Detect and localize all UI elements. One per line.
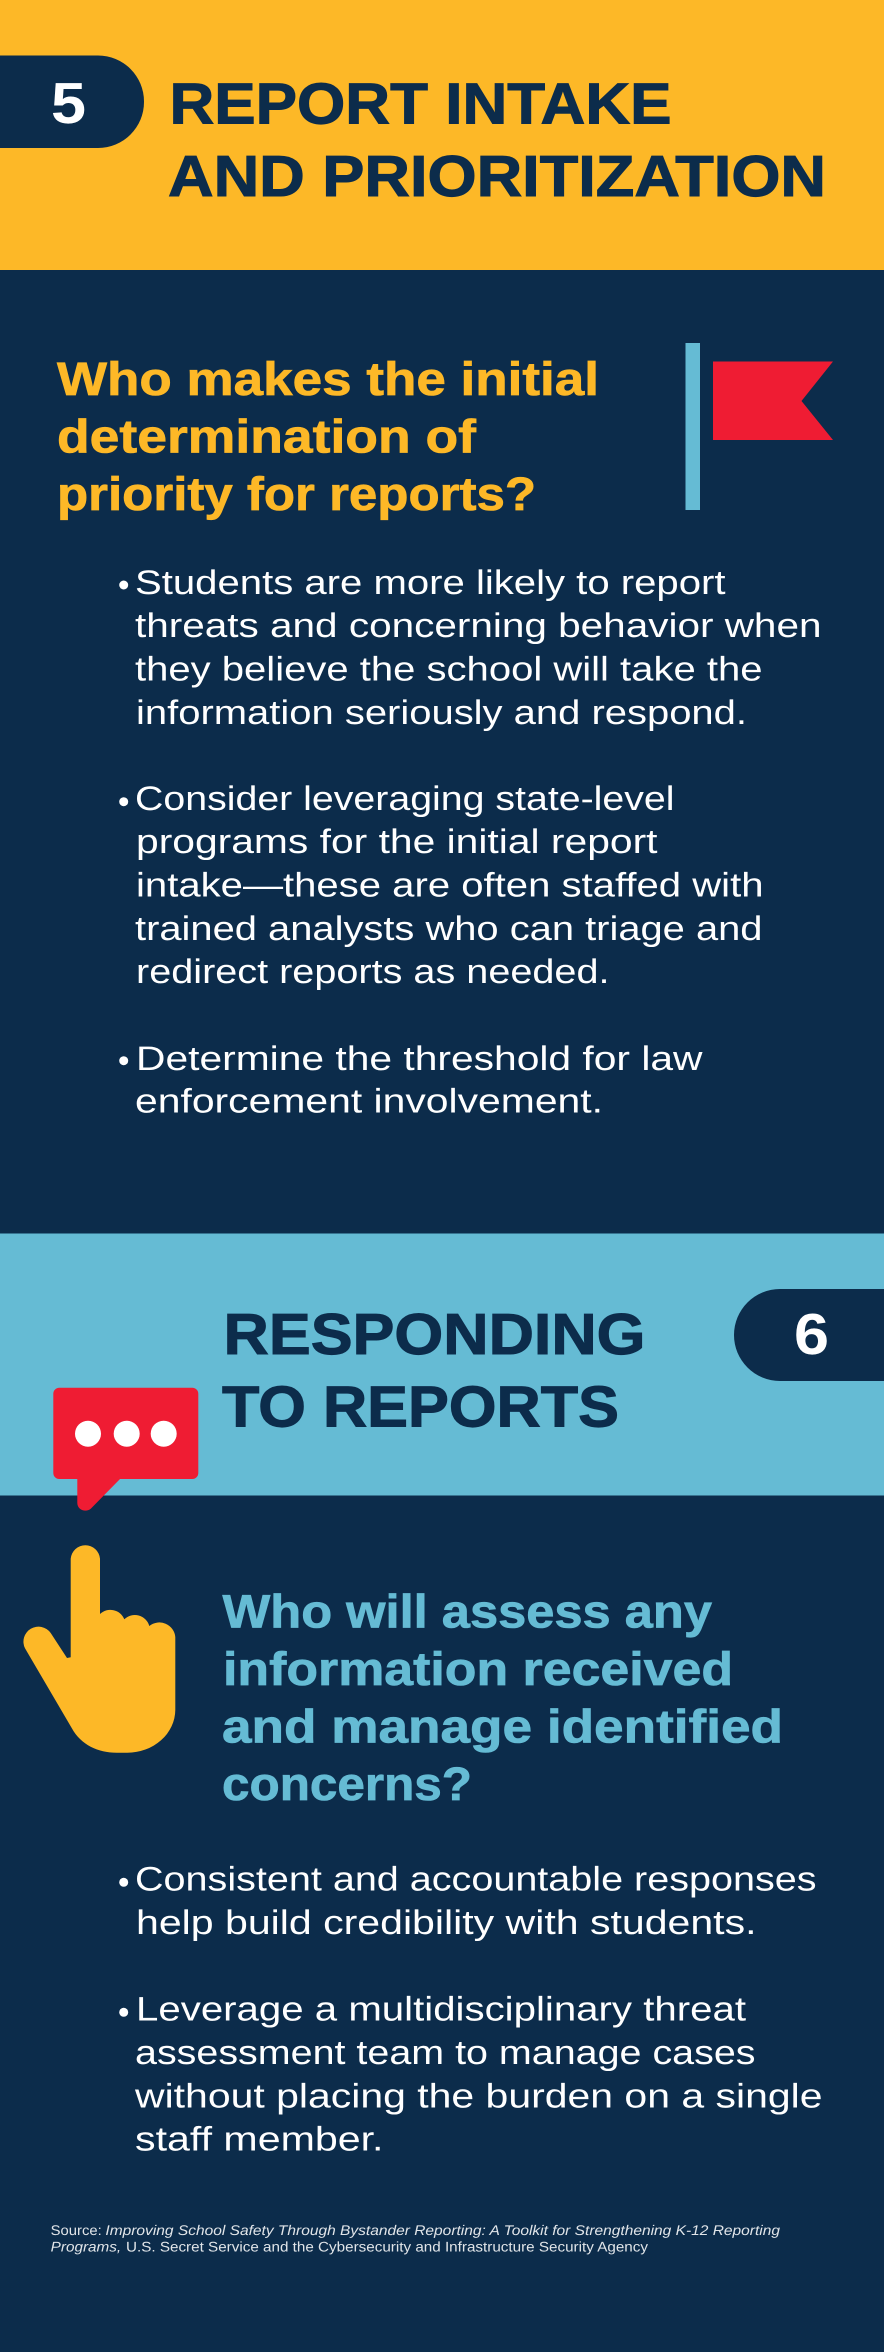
bullet: state-level programs: programs for the initial report: [136, 823, 658, 861]
heading: who will assess any information: Who will assess any: [222, 1585, 712, 1638]
source citation: U.S. Secret Service and the Cybersecurity and Infrastructure Security Agency: [126, 2239, 648, 2255]
source citation: Source:: [51, 2222, 102, 2238]
bullet: consistent responses: [119, 1861, 816, 1942]
heading: who will assess any information: [222, 1585, 783, 1810]
bullet: students more likely to report: they believe the school will take the: [135, 650, 762, 688]
source citation: Programs,: [51, 2239, 121, 2255]
bullet: students more likely to report: Students are more likely to report: [135, 564, 726, 602]
bullet: state-level programs: [119, 780, 763, 991]
number badge 6: [734, 1289, 884, 1381]
heading: who makes the initial determination: determination of: [57, 410, 476, 462]
bullet: multidisciplinary team: Leverage a multidisciplinary threat: [136, 1991, 747, 2029]
source citation: Improving School Safety Through Bystander Reporting: A Toolkit for Strengthening K-12 Reporting: [105, 2222, 780, 2238]
title: report intake and prioritization: AND PRIORITIZATION: [168, 144, 826, 209]
bullet: multidisciplinary team: [119, 1991, 822, 2159]
title: report intake and prioritization: REPORT INTAKE: [170, 72, 672, 136]
bullet: state-level programs: redirect reports as needed.: [136, 953, 610, 991]
heading: who makes the initial determination: Who makes the initial: [57, 352, 599, 405]
number badge 5: 5: [51, 71, 86, 136]
icon: red speech bubble: [53, 1388, 198, 1511]
bullet: law enforcement threshold: [119, 1040, 703, 1121]
title: responding to reports: RESPONDING: [224, 1302, 646, 1367]
icon: red flag: [686, 343, 833, 510]
bullet: students more likely to report: information seriously and respond.: [136, 694, 747, 732]
bullet: students more likely to report: [119, 564, 821, 732]
bullet: consistent responses: help build credibility with students.: [136, 1904, 756, 1942]
title: report intake and prioritization: [168, 72, 826, 209]
panel: section 5 header: [0, 0, 884, 270]
heading: who makes the initial determination: [57, 352, 599, 520]
panel: section 6 header: [0, 1234, 884, 1496]
heading: who will assess any information: concerns?: [222, 1757, 472, 1810]
bullet: state-level programs: Consider leveraging state-level: [135, 780, 674, 818]
bullet: state-level programs: trained analysts who can triage and: [135, 910, 762, 948]
bullet: consistent responses: Consistent and accountable responses: [135, 1861, 816, 1899]
icon: yellow pointing hand: [23, 1545, 175, 1753]
bullet: law enforcement threshold: enforcement involvement.: [135, 1083, 603, 1121]
bullet: state-level programs: intake—these are often staffed with: [136, 866, 764, 904]
bullet: multidisciplinary team: staff member.: [135, 2121, 384, 2159]
bullet: multidisciplinary team: assessment team to manage cases: [135, 2034, 756, 2072]
source citation: [51, 2222, 780, 2255]
bullet: multidisciplinary team: without placing the burden on a single: [134, 2077, 823, 2115]
heading: who will assess any information: information received: [223, 1642, 733, 1695]
number badge 6: 6: [794, 1302, 829, 1367]
bullet: students more likely to report: threats and concerning behavior when: [135, 607, 822, 645]
title: responding to reports: [222, 1302, 646, 1440]
heading: who makes the initial determination: priority for reports?: [57, 467, 536, 520]
bullet: law enforcement threshold: Determine the threshold for law: [136, 1040, 703, 1078]
heading: who will assess any information: and manage identified: [222, 1699, 783, 1752]
number badge 5: [0, 56, 144, 148]
title: responding to reports: TO REPORTS: [222, 1375, 619, 1440]
